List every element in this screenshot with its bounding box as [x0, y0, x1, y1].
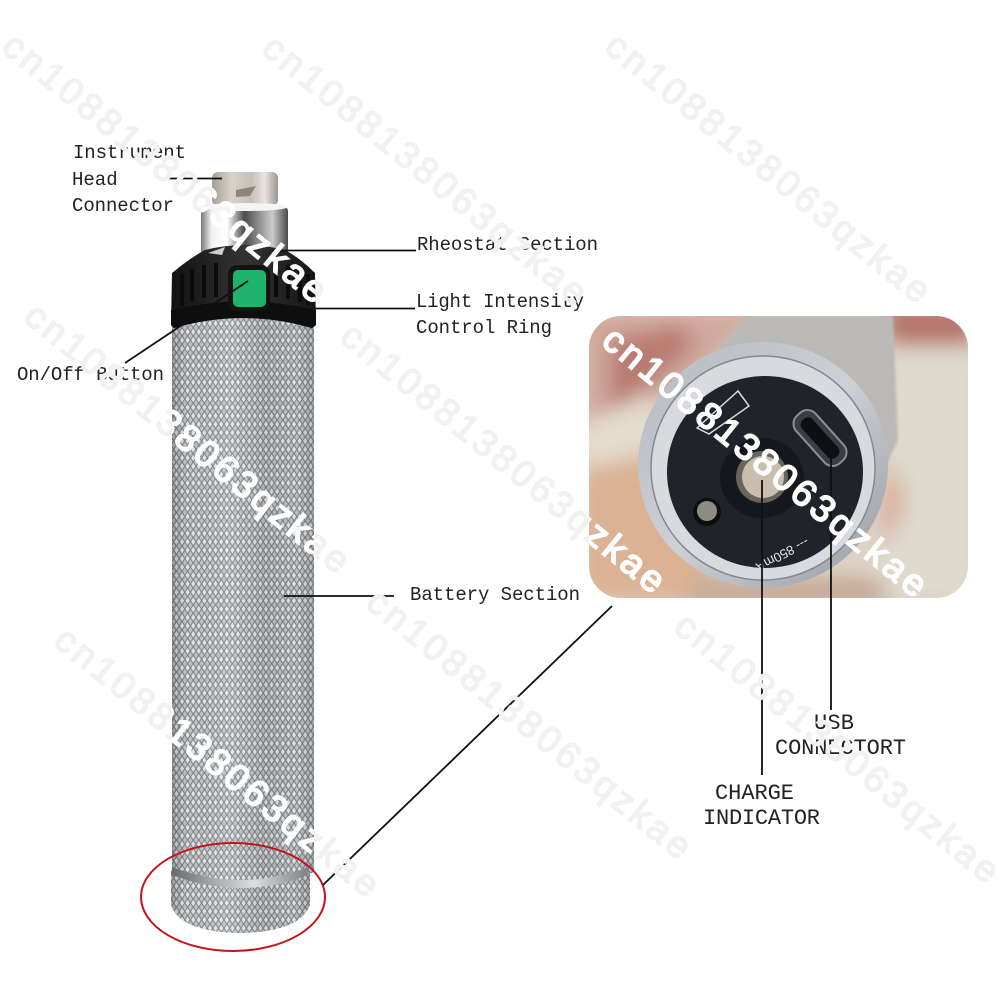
icon: green on/off button [228, 265, 270, 311]
watermark: grey tile text on background: cn1088138063qzkae [47, 618, 388, 905]
watermark: white text over product: cn1088138063qzkae [359, 580, 700, 867]
handle: metal band and end cap [171, 867, 310, 933]
handle: instrument head connector [201, 172, 288, 255]
label: instrument head connector: Connector [72, 195, 174, 217]
watermark: white text over product [171, 188, 924, 854]
label: on/off button: On/Off Button [17, 364, 164, 386]
watermark: grey tile text on background: cn1088138063qzkae [598, 24, 939, 311]
photo: silver ring and black end disc [638, 342, 888, 588]
label: charge indicator: INDICATOR [703, 806, 820, 831]
label: charge indicator: CHARGE [715, 781, 794, 806]
watermark: white text over product: cn1088138063qzkae [47, 618, 388, 905]
watermark: grey tile text on background: cn1088138063qzkae [17, 294, 358, 581]
highlight ellipse [141, 843, 325, 951]
label: USB connector: USB [814, 711, 854, 736]
label: USB connector [775, 711, 906, 761]
label: USB connector: CONNECTORT [775, 736, 906, 761]
handle: black rheostat ring [171, 245, 316, 328]
photo: indicator LED [693, 498, 721, 526]
photo: 850mA label: --- 850mA [753, 534, 812, 575]
handle: knurled battery body [172, 305, 314, 886]
watermark: white text over product: cn1088138063qzkae [595, 318, 936, 605]
device: otoscope battery handle [171, 172, 316, 933]
label: light intensity control ring: Light Intensity [416, 291, 584, 313]
watermark: white text over product: cn1088138063qzkae [17, 294, 358, 581]
watermark: grey tile text on background: cn1088138063qzkae [359, 580, 700, 867]
label: instrument head connector: Head [72, 169, 118, 191]
watermark: grey tile text on background: cn1088138063qzkae [255, 26, 596, 313]
label: light intensity control ring: Control Ring [416, 317, 552, 339]
watermark: grey tile text on background: cn1088138063qzkae [667, 604, 1000, 891]
photo: knurled cylinder [716, 316, 899, 464]
leader lines [125, 178, 831, 885]
label: instrument head connector: Instrument [73, 142, 186, 164]
label: light intensity control ring [416, 291, 584, 339]
photo: blurred hand and background [580, 305, 975, 605]
label: instrument head connector [72, 142, 186, 217]
panel: photo of charging end [580, 305, 975, 605]
label: rheostat section: Rheostat Section [417, 234, 598, 256]
watermark: white text over product: cn1088138063qzkae [255, 26, 596, 313]
watermark: grey tile text on background: cn1088138063qzkae [595, 318, 936, 605]
watermark: white text over product: cn1088138063qzkae [0, 24, 336, 311]
photo: battery icon on disc [697, 391, 749, 434]
photo: USB port [792, 409, 848, 467]
photo: charging pin [736, 451, 788, 503]
watermark: grey tile text on background: cn1088138063qzkae [0, 24, 336, 311]
watermark: white text over product: cn1088138063qzkae [333, 314, 674, 601]
watermark: grey tile text on background: cn1088138063qzkae [333, 314, 674, 601]
label: battery section: Battery Section [410, 584, 580, 606]
label: charge indicator [703, 781, 820, 831]
